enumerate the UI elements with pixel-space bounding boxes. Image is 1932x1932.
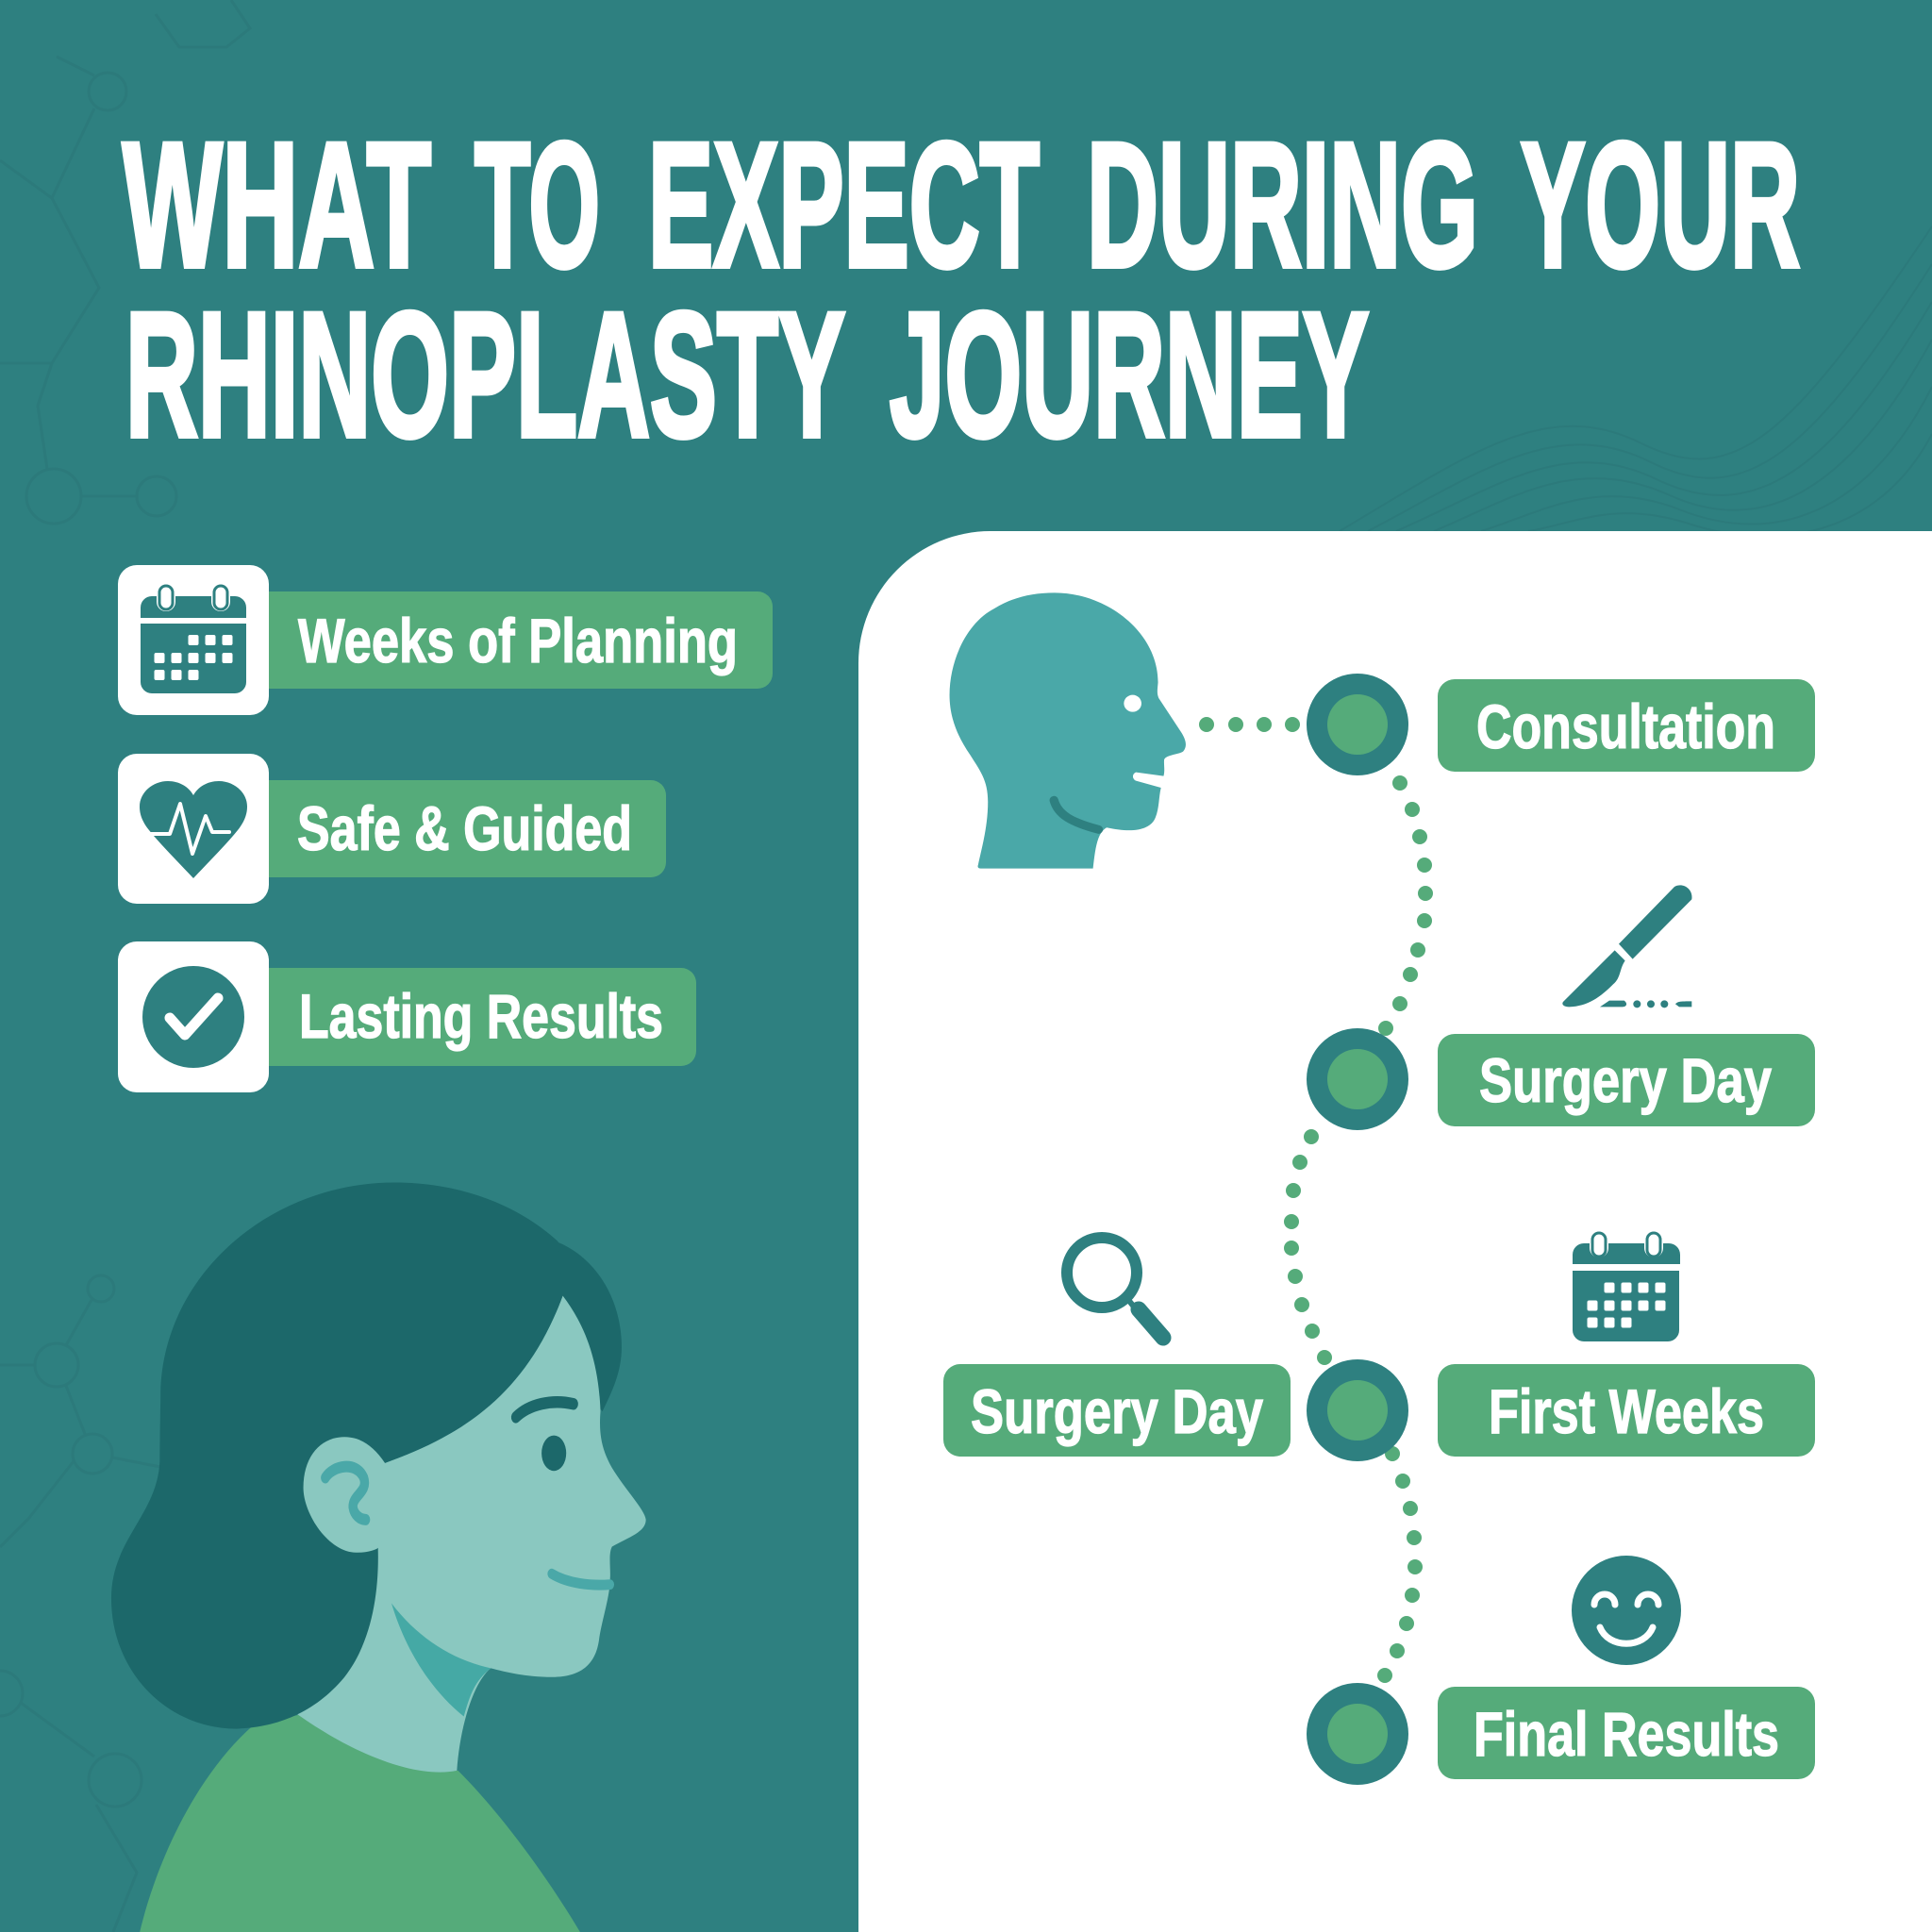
icon: calendar [141, 586, 246, 693]
title: WHAT [123, 106, 431, 304]
title: JOURNEY [890, 275, 1369, 474]
label pill: surgery day left: Surgery Day [971, 1376, 1263, 1446]
label pill: consultation: Consultation [1476, 691, 1775, 761]
icon: heart with pulse [140, 781, 247, 878]
badge: weeks of planning [118, 565, 773, 715]
timeline node: consultation [1307, 674, 1408, 775]
label pill: consultation [1438, 679, 1815, 772]
label pill: first weeks [1438, 1364, 1815, 1457]
illustration: head profile icon [950, 592, 1186, 869]
title: TO [475, 106, 600, 304]
label pill: surgery day left [943, 1364, 1291, 1457]
label pill: final results [1438, 1687, 1815, 1779]
label: weeks of planning: Weeks of Planning [298, 606, 738, 675]
label: safe and guided: Safe & Guided [297, 793, 632, 863]
timeline node: surgery day [1307, 1028, 1408, 1130]
label: lasting results: Lasting Results [299, 981, 663, 1051]
label pill: first weeks: First Weeks [1489, 1376, 1764, 1446]
title: EXPECT [648, 106, 1040, 304]
badge: lasting results [118, 941, 696, 1092]
title [123, 106, 1800, 474]
icon: magnifying glass [1067, 1238, 1163, 1338]
label pill: surgery day [1438, 1034, 1815, 1126]
badge: safe and guided [118, 754, 666, 904]
icon: check circle [142, 966, 244, 1068]
title: DURING [1087, 106, 1478, 304]
icon: scalpel [1562, 885, 1691, 1008]
illustration: woman in profile [111, 1182, 646, 1932]
icon: smiley [1572, 1556, 1681, 1665]
label pill: surgery day: Surgery Day [1479, 1045, 1772, 1115]
timeline node: final results [1307, 1683, 1408, 1785]
title: RHINOPLASTY [125, 275, 845, 474]
label pill: final results: Final Results [1474, 1699, 1779, 1769]
timeline node: first weeks [1307, 1359, 1408, 1461]
timeline: dotted connector [1199, 717, 1433, 1683]
icon: calendar small [1573, 1233, 1680, 1341]
panel: journey timeline background [858, 531, 1932, 1932]
